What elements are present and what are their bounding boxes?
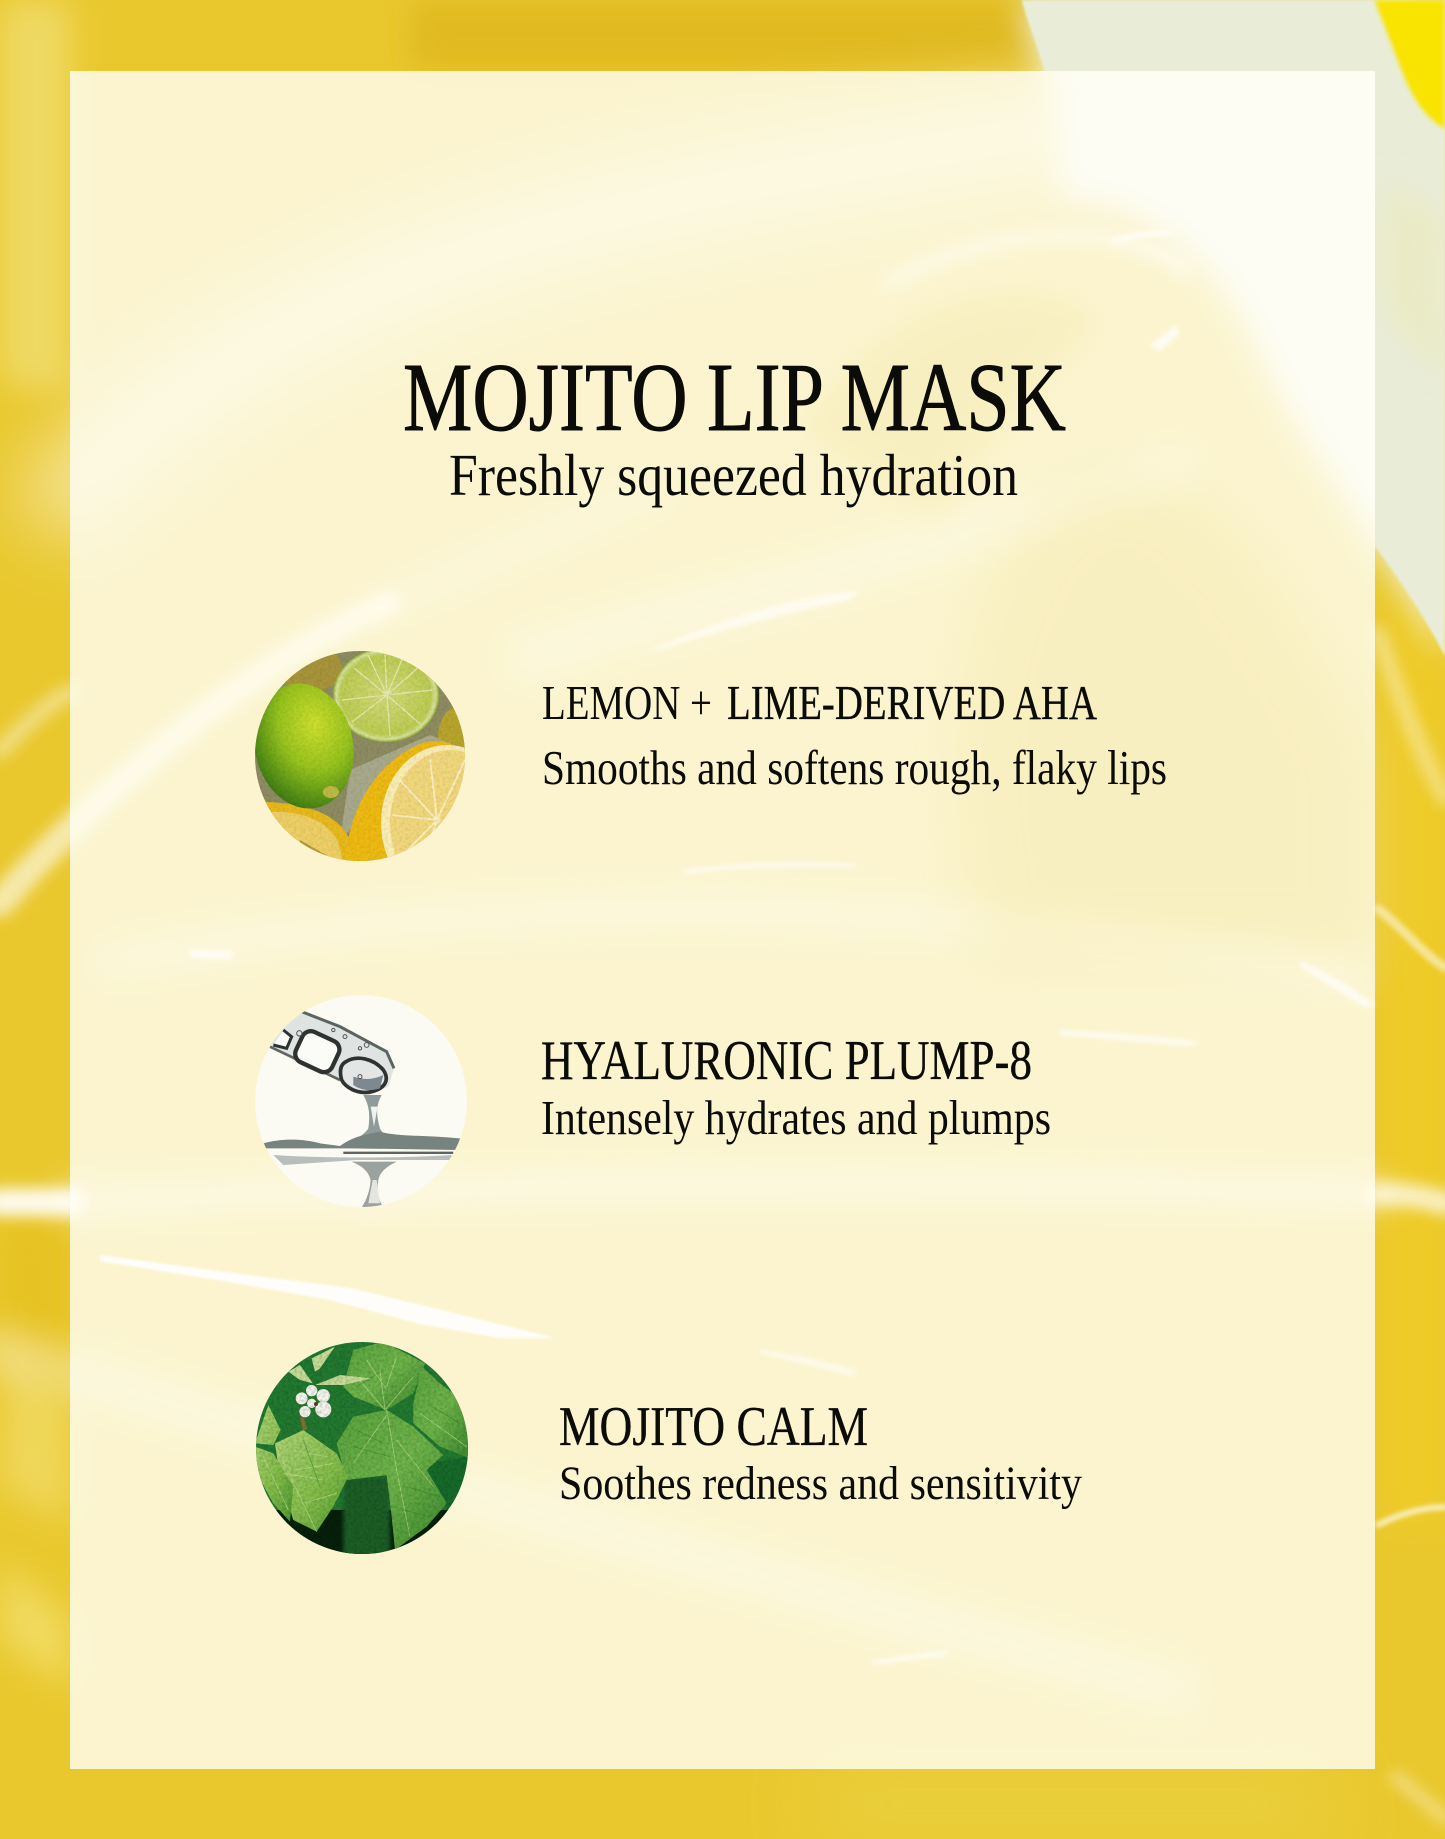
- ingredient 3: description: Soothes redness and sensitivity: [559, 1457, 1082, 1510]
- lime slice: [333, 648, 439, 742]
- title: MOJITO LIP MASK: [403, 344, 1066, 451]
- ingredient 3: heading: MOJITO CALM: [559, 1396, 868, 1458]
- ingredient 3: photo of mint leaves: [256, 1342, 468, 1554]
- lemon slice: [346, 741, 465, 861]
- ingredient 1: heading: LEMON +: [542, 675, 712, 730]
- ingredient 1: heading: [542, 675, 1097, 730]
- small lemon slice: [266, 802, 355, 861]
- ingredient 2: heading: HYALURONIC PLUMP-8: [541, 1030, 1032, 1092]
- ingredient 1: description: Smooths and softens rough, flaky lips: [542, 740, 1167, 795]
- pale vesicle arcs: [891, 236, 1185, 281]
- glossy highlights on panel: [100, 231, 1375, 1665]
- ingredient 2: photo of serum dropper: [255, 995, 467, 1207]
- ingredient 2: description: Intensely hydrates and plumps: [541, 1090, 1051, 1145]
- soft pith behind panel: [1022, 0, 1445, 657]
- ingredient 1: photo of lemons and limes: [255, 651, 465, 861]
- whole lime: [255, 684, 354, 808]
- subtitle: Freshly squeezed hydration: [449, 442, 1018, 508]
- ingredient 1: heading: LIME-DERIVED AHA: [727, 675, 1097, 730]
- lemon pith outside panel: [1022, 0, 1445, 657]
- panel tints: lemon vesicles: [800, 293, 1375, 960]
